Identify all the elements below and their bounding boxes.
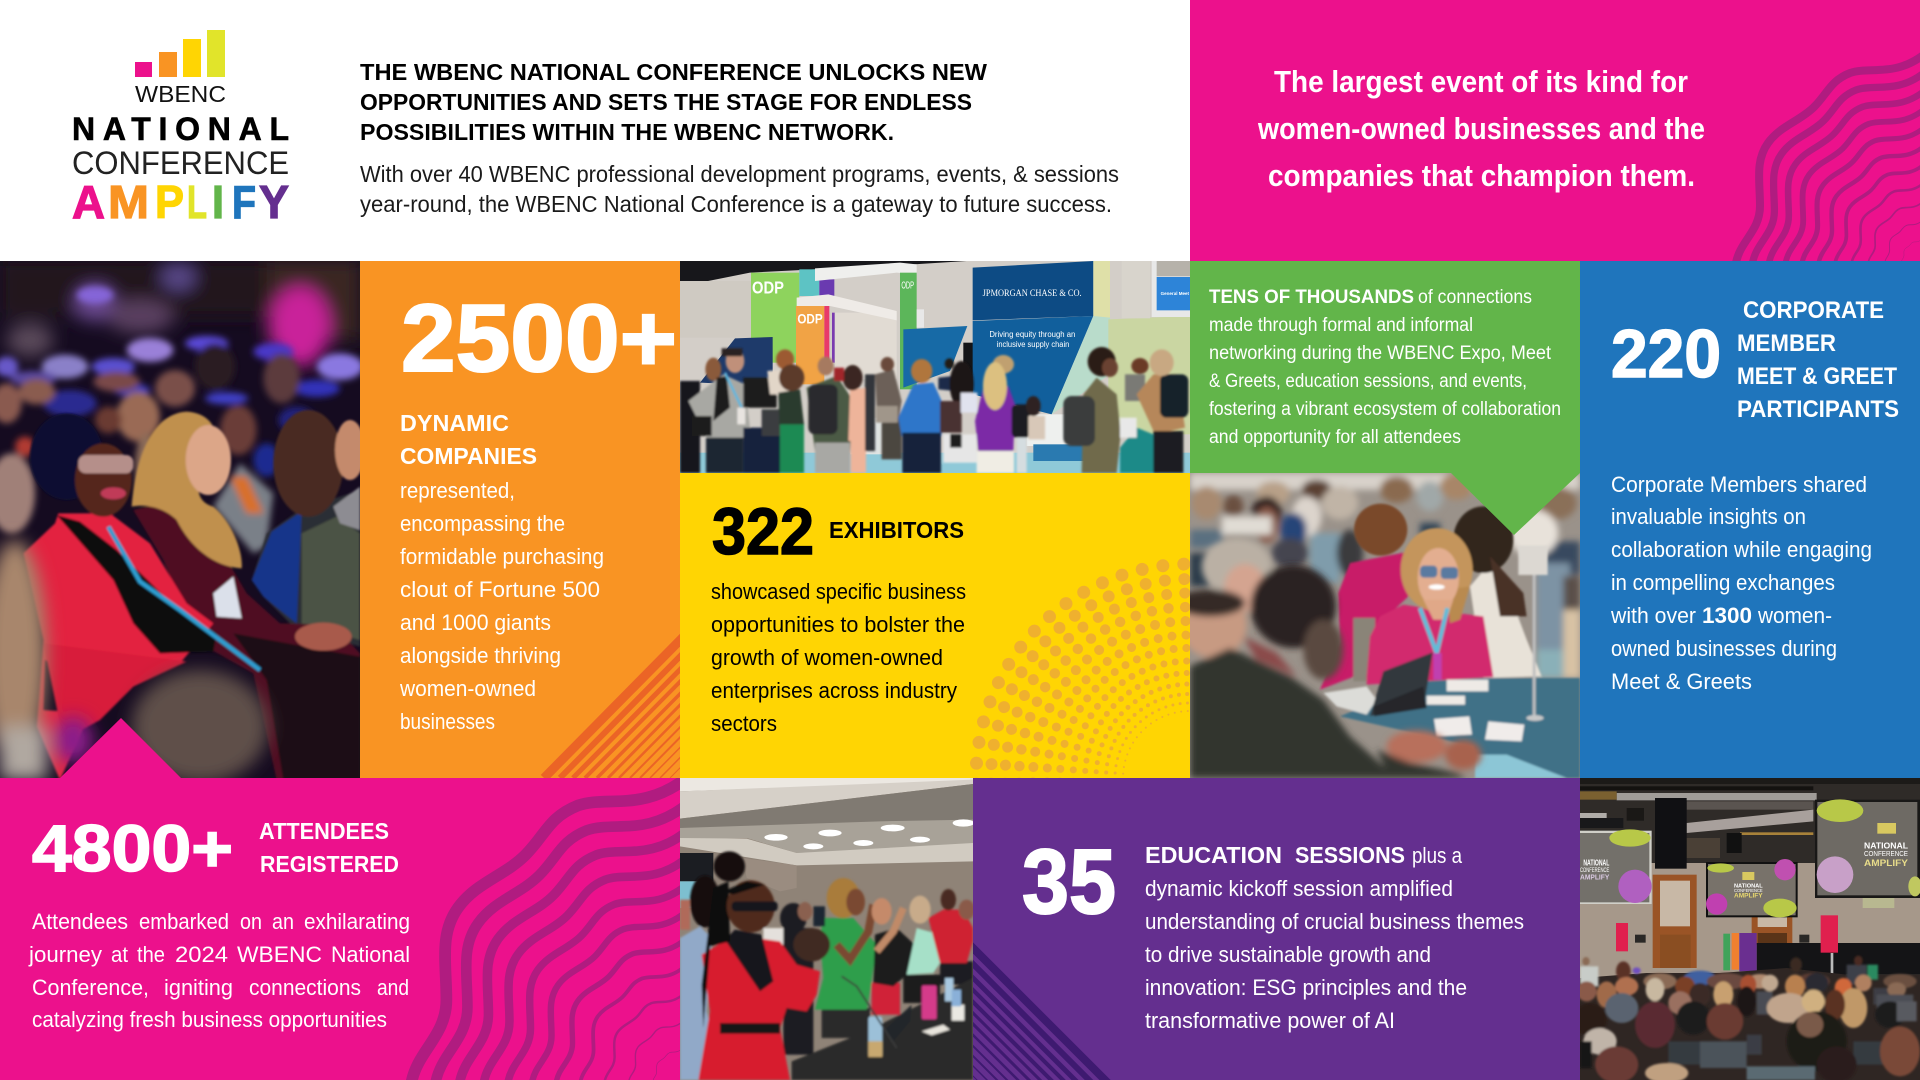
maroon top and lower clothing xyxy=(133,500,360,780)
screen left: AMPLIFY xyxy=(1580,872,1609,881)
black blouse xyxy=(57,515,217,653)
stat 322: 322 xyxy=(712,494,814,568)
hands xyxy=(1387,730,1447,762)
attendees body text: embarked xyxy=(139,909,229,934)
stripes decoration xyxy=(541,634,680,778)
logo word AMPLIFY: L xyxy=(187,176,207,228)
ceiling truss xyxy=(1580,778,1920,869)
tagline text: The largest event of its kind for xyxy=(1274,64,1688,99)
photo: networking table xyxy=(1175,473,1580,778)
blue heading: MEMBER xyxy=(1737,330,1836,357)
attendees body text: Attendees xyxy=(32,909,128,934)
icon: rising bars xyxy=(135,30,225,77)
orange heading: DYNAMIC xyxy=(400,410,509,436)
attendees body text: connections xyxy=(249,975,361,1000)
yellow body text: opportunities to bolster the xyxy=(711,612,965,637)
screen left: NATIONAL xyxy=(1583,858,1609,867)
tagline text: companies that champion them. xyxy=(1268,158,1695,193)
purple text: SESSIONS xyxy=(1295,842,1405,868)
wave pattern bottom xyxy=(411,776,689,1080)
blonde hair xyxy=(1401,528,1473,611)
orange body text: represented, xyxy=(400,478,515,503)
blonde hair and face xyxy=(132,412,242,568)
orange heading xyxy=(400,410,537,469)
yellow body text: showcased specific business xyxy=(711,579,966,604)
blue heading: MEET & GREET xyxy=(1737,363,1897,390)
background attendees xyxy=(680,900,690,930)
photo: expo floor booths xyxy=(680,261,1190,473)
screen left: CONFERENCE xyxy=(1580,868,1609,874)
green shirt woman xyxy=(822,1008,870,1038)
logo word AMPLIFY: I xyxy=(212,176,224,228)
green body text: of connections xyxy=(1418,287,1532,308)
logo word AMPLIFY: P xyxy=(155,176,184,228)
stripes decoration xyxy=(822,925,1110,1080)
blue heading: PARTICIPANTS xyxy=(1737,396,1899,423)
wave pattern top right xyxy=(1736,53,1920,263)
red jacket xyxy=(23,513,213,780)
tagline text xyxy=(1257,64,1705,193)
doors xyxy=(1653,875,1697,968)
logo word AMPLIFY: F xyxy=(232,176,256,228)
hand and sleeve xyxy=(295,623,352,651)
blue heading: CORPORATE xyxy=(1743,297,1884,324)
man head and jacket xyxy=(1243,636,1297,676)
attendees body text xyxy=(28,909,410,1032)
yellow body text xyxy=(711,579,966,736)
booth signage text: ODP xyxy=(901,280,914,291)
panel: blue corporate members xyxy=(1580,261,1920,778)
purple text: dynamic kickoff session amplified xyxy=(1145,876,1453,901)
attendees body text: and xyxy=(377,975,409,1000)
attendees body text: exhilarating xyxy=(304,909,410,934)
green body text: networking during the WBENC Expo, Meet xyxy=(1209,343,1552,364)
green body text xyxy=(1209,287,1561,448)
blue body text: invaluable insights on xyxy=(1611,504,1806,529)
screen center: NATIONAL xyxy=(1734,883,1763,889)
header body text: year-round, the WBENC National Conference is a gateway to future success. xyxy=(360,191,1112,217)
booth signage text: ODP xyxy=(752,278,784,298)
attendees body text: 2024 xyxy=(175,942,228,967)
purple text: understanding of crucial business themes xyxy=(1145,909,1524,934)
cards and tablet xyxy=(1447,680,1488,691)
purple text xyxy=(1145,842,1524,1033)
blue body text: Corporate Members shared xyxy=(1611,472,1867,497)
lanyard xyxy=(108,527,260,670)
attendees body text: igniting xyxy=(164,975,233,1000)
dark hair and face xyxy=(30,413,103,500)
orange body text: formidable purchasing xyxy=(400,544,604,569)
screen right: NATIONAL xyxy=(1864,841,1908,851)
logo word AMPLIFY: A xyxy=(72,176,105,228)
blue body text xyxy=(1610,472,1872,694)
attendees body text: on xyxy=(240,909,262,934)
logo word AMPLIFY: M xyxy=(108,176,149,228)
banners xyxy=(1616,923,1628,951)
orange body text: women-owned xyxy=(399,676,536,701)
stat 4800+: 4800+ xyxy=(32,811,233,885)
lanyard xyxy=(1420,608,1447,653)
logo wordmark WBENC: WBENC xyxy=(135,81,226,107)
purple text: plus a xyxy=(1412,843,1463,868)
attendees heading: REGISTERED xyxy=(260,851,399,877)
red jacket woman xyxy=(698,938,820,1080)
blue body text: owned businesses during xyxy=(1611,636,1837,661)
pink jacket back xyxy=(1320,551,1410,690)
photo: seated audience smiling xyxy=(0,260,365,783)
purple text: to drive sustainable growth and xyxy=(1145,942,1431,967)
screen right: CONFERENCE xyxy=(1864,851,1908,858)
screen right xyxy=(1815,799,1920,898)
blue body text: Meet & Greets xyxy=(1611,669,1752,694)
header heading: OPPORTUNITIES AND SETS THE STAGE FOR ENDLESS xyxy=(360,89,972,115)
header body text xyxy=(360,161,1119,217)
panel: orange 2500+ dynamic companies xyxy=(360,261,680,778)
panel: yellow 322 exhibitors xyxy=(680,473,1190,778)
logo word CONFERENCE: CONFERENCE xyxy=(72,145,289,181)
attendees heading: ATTENDEES xyxy=(259,818,389,844)
expo attendees xyxy=(680,347,1188,473)
purple text: transformative power of AI xyxy=(1145,1008,1395,1033)
booth signage text: ODP xyxy=(797,311,823,327)
green body text: and opportunity for all attendees xyxy=(1209,427,1461,448)
attendees body text: an xyxy=(272,909,294,934)
booth signage text: inclusive supply chain xyxy=(997,340,1069,349)
header body text: With over 40 WBENC professional development programs, events, & sessions xyxy=(360,161,1119,187)
blue body text: collaboration while engaging xyxy=(1611,537,1872,562)
yellow body text: sectors xyxy=(711,711,777,736)
orange body text xyxy=(399,478,604,734)
orange body text: and 1000 giants xyxy=(400,610,551,635)
logo: WBENC National Conference Amplify xyxy=(72,30,289,228)
header heading: POSSIBILITIES WITHIN THE WBENC NETWORK. xyxy=(360,119,894,145)
logo word NATIONAL: NATIONAL xyxy=(72,111,289,147)
attendees body text: WBENC xyxy=(237,942,322,967)
orange body text: alongside thriving xyxy=(400,643,561,668)
green body text: & Greets, education sessions, and events, xyxy=(1209,371,1527,392)
attendees body text: catalyzing fresh business opportunities xyxy=(32,1007,387,1032)
third woman jacket xyxy=(252,490,360,647)
mint woman xyxy=(903,975,940,1003)
left women xyxy=(1202,538,1272,595)
stat 220: 220 xyxy=(1611,316,1721,392)
stat 2500+: 2500+ xyxy=(401,285,677,392)
attendees body text: journey xyxy=(28,942,102,967)
yellow body text: enterprises across industry xyxy=(711,678,957,703)
blue body text: women- xyxy=(1757,603,1832,628)
orange body text: encompassing the xyxy=(400,511,565,536)
orange body text: clout of Fortune 500 xyxy=(400,577,600,602)
sunburst dots decoration xyxy=(970,558,1190,778)
screen left xyxy=(1580,829,1652,904)
blue body text: in compelling exchanges xyxy=(1611,570,1835,595)
panel: green tens of thousands xyxy=(1190,261,1580,535)
blue body text: with over xyxy=(1610,603,1696,628)
panel: pink 4800+ attendees xyxy=(0,718,689,1080)
screen right: AMPLIFY xyxy=(1864,858,1909,868)
attendees heading xyxy=(259,818,399,877)
triangle pointer xyxy=(60,718,181,778)
purple text: innovation: ESG principles and the xyxy=(1145,975,1467,1000)
screen center: CONFERENCE xyxy=(1734,888,1763,893)
table xyxy=(1340,678,1580,778)
header heading xyxy=(360,59,988,145)
screen center xyxy=(1706,859,1798,917)
logo word AMPLIFY xyxy=(72,176,289,228)
green body text: fostering a vibrant ecosystem of collaboration xyxy=(1209,399,1561,420)
next woman xyxy=(872,983,900,1015)
panel: purple 35 education sessions xyxy=(822,778,1580,1080)
attendees body text: the xyxy=(137,942,165,967)
blue body text: 1300 xyxy=(1702,603,1752,628)
black curtain xyxy=(1757,943,1920,975)
exhibitors heading: EXHIBITORS xyxy=(829,517,964,543)
white header background xyxy=(0,0,1190,261)
orange body text: businesses xyxy=(400,709,495,734)
booth signage text: General Meet xyxy=(1161,291,1189,296)
yellow body text: growth of women-owned xyxy=(711,645,943,670)
attendees body text: Conference, xyxy=(32,975,149,1000)
screen center: AMPLIFY xyxy=(1734,894,1763,900)
photo: conference ballroom xyxy=(1573,778,1920,1080)
tagline text: women-owned businesses and the xyxy=(1257,111,1705,146)
blue heading xyxy=(1737,297,1899,423)
orange heading: COMPANIES xyxy=(400,443,537,469)
green body text: TENS OF THOUSANDS xyxy=(1209,287,1414,308)
logo word AMPLIFY: Y xyxy=(259,176,289,228)
attendees body text: at xyxy=(111,942,128,967)
attendees body text: National xyxy=(331,942,410,967)
stat 35: 35 xyxy=(1022,831,1116,933)
right woman hair and white top xyxy=(1470,563,1542,678)
photo: woman in red filming xyxy=(680,778,975,1080)
table and items xyxy=(792,978,973,1080)
header heading: THE WBENC NATIONAL CONFERENCE UNLOCKS NEW xyxy=(360,59,988,85)
green body text: made through formal and informal xyxy=(1209,315,1473,336)
seated crowd xyxy=(1573,956,1920,1080)
purple text: EDUCATION xyxy=(1145,842,1282,868)
booth signage text xyxy=(752,278,1189,349)
booth signage text: Driving equity through an xyxy=(989,330,1075,339)
red man xyxy=(940,961,973,985)
booth signage text: JPMORGAN CHASE & CO. xyxy=(983,288,1082,299)
panel: pink tagline xyxy=(1190,0,1920,263)
third woman curly hair and face xyxy=(273,410,343,517)
blue coat woman xyxy=(680,926,713,1080)
pink sweater xyxy=(1367,605,1493,685)
